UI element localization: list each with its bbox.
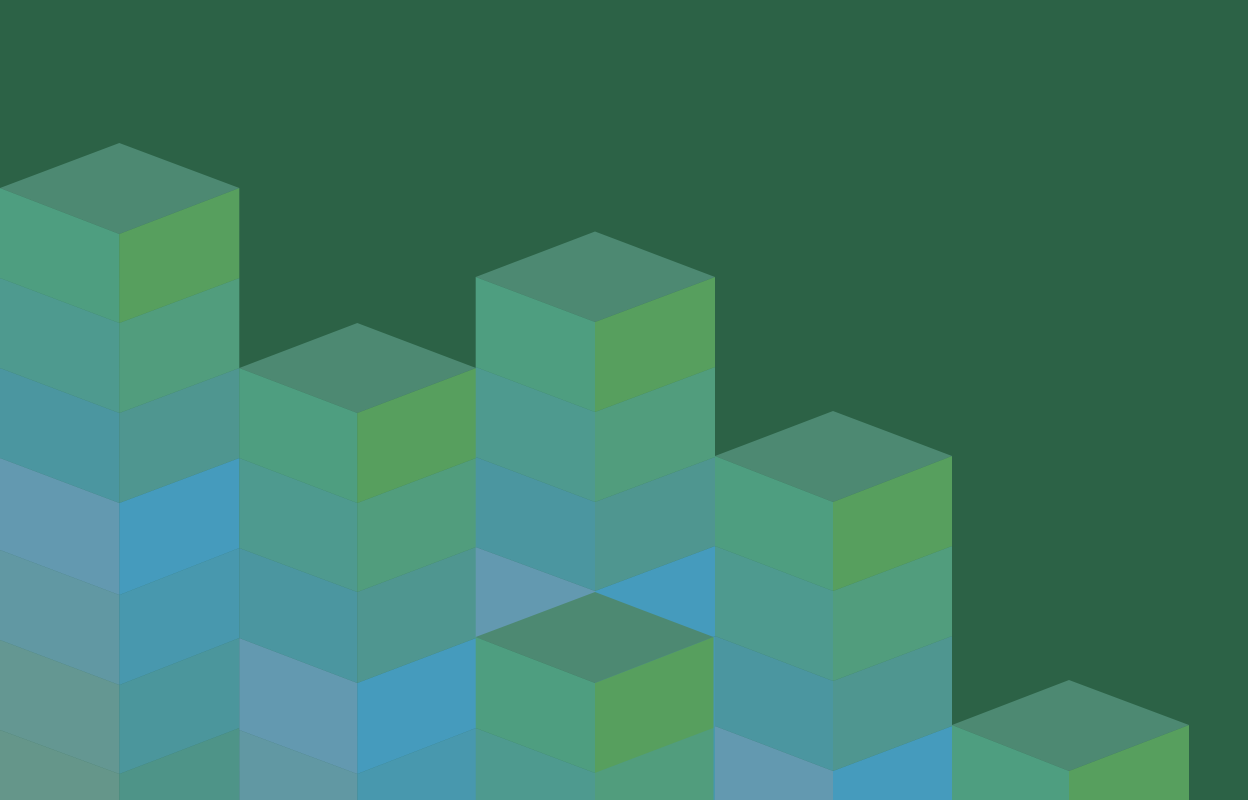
column 5: shortest stack at right <box>952 680 1189 800</box>
column 1: tallest stack at left <box>0 143 239 800</box>
column 3: lower front stack <box>476 592 714 800</box>
column 3: upper stack <box>476 232 715 800</box>
column 4: stepped stack <box>715 411 952 800</box>
column 2: medium stack <box>239 323 476 800</box>
